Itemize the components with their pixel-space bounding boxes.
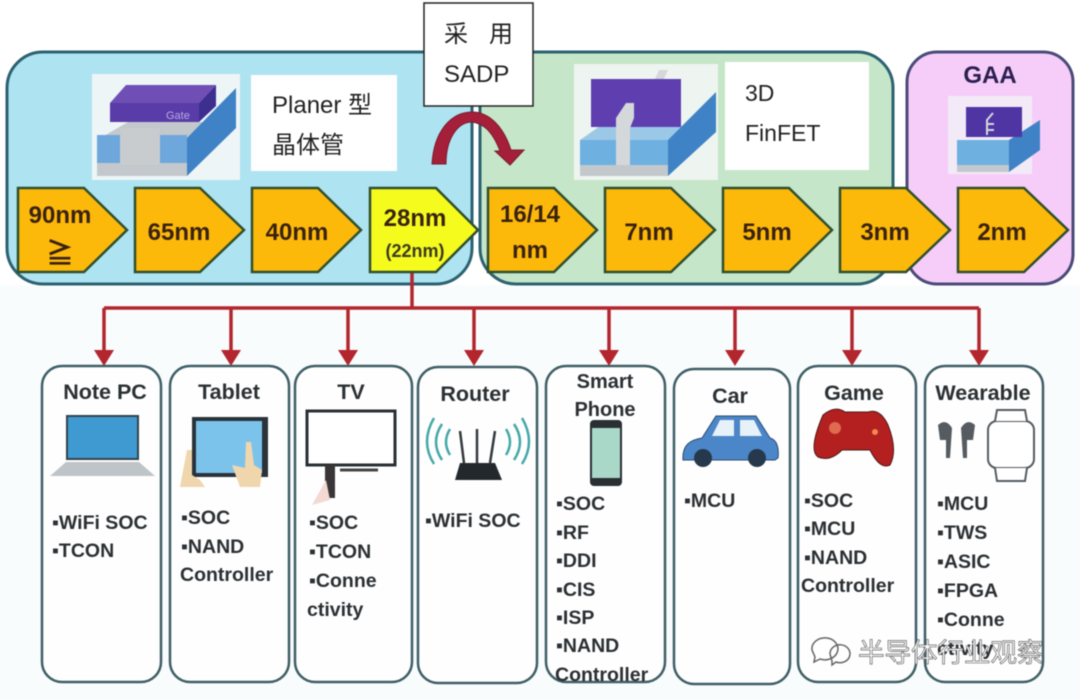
label: planar xyxy=(251,75,397,171)
icon: GAA transistor xyxy=(948,96,1040,174)
card: Smart Phone: ▪SOC xyxy=(556,493,605,515)
label: planar: Planer 型 xyxy=(272,92,372,119)
node: 28nm: (22nm) xyxy=(385,241,445,261)
card: Wearable: ▪ASIC xyxy=(937,551,991,573)
card: Smart Phone: ▪NAND xyxy=(556,635,619,657)
icon: planar transistor: Gate xyxy=(166,110,190,122)
card: Wearable: ▪TWS xyxy=(937,522,987,544)
card: Tablet: Controller xyxy=(180,564,274,586)
card: Tablet: ▪SOC xyxy=(181,507,230,529)
card: Wearable: ▪MCU xyxy=(937,493,988,515)
icon: laptop xyxy=(50,415,155,476)
node: 28nm xyxy=(370,188,478,272)
card: Smart Phone xyxy=(546,366,665,686)
icon: FinFET transistor xyxy=(574,64,718,180)
card: Wearable: ▪Conne xyxy=(937,609,1005,631)
card: Smart Phone: ▪ISP xyxy=(556,607,594,629)
node: 28nm: 28nm xyxy=(384,205,446,232)
card: TV xyxy=(295,366,412,682)
card: Car xyxy=(674,369,790,684)
card: Wearable: ▪FPGA xyxy=(937,580,998,602)
panel: FinFET xyxy=(480,52,893,284)
card: Smart Phone: Controller xyxy=(555,664,649,686)
card: Router: Router xyxy=(440,382,510,406)
node: 2nm xyxy=(958,188,1068,272)
card: TV: ▪SOC xyxy=(309,512,358,534)
icon: TV with hand xyxy=(307,411,395,505)
node: 5nm: 5nm xyxy=(742,219,792,246)
arrow: curved transition to FinFET xyxy=(432,112,524,165)
callout: SADP: SADP xyxy=(444,61,509,88)
card: TV: ▪TCON xyxy=(309,541,371,563)
label: FinFET: FinFET xyxy=(745,120,820,146)
callout: SADP: 用 xyxy=(489,21,513,48)
card: Car: ▪MCU xyxy=(684,490,735,512)
icon: tablet xyxy=(180,417,268,487)
node: 16/14nm xyxy=(488,188,597,272)
card: Note PC: ▪TCON xyxy=(52,540,114,562)
card: Smart Phone: Smart xyxy=(577,371,634,393)
card: Smart Phone: ▪RF xyxy=(556,522,589,544)
icon: planar transistor xyxy=(92,74,240,180)
card: Game: Controller xyxy=(801,575,895,597)
card: Game: ▪MCU xyxy=(804,518,855,540)
card: Tablet: Tablet xyxy=(198,380,260,404)
node: 3nm xyxy=(840,188,950,272)
card: Game xyxy=(798,366,916,682)
node: 90nm: 90nm xyxy=(29,202,91,229)
card: Smart Phone: ▪CIS xyxy=(556,579,595,601)
heading: GAA: GAA xyxy=(963,62,1017,89)
card: Router: ▪WiFi SOC xyxy=(425,510,521,532)
card: Wearable: Wearable xyxy=(935,381,1031,405)
card: Wearable xyxy=(925,366,1043,682)
card: TV: ctivity xyxy=(307,599,364,621)
node: 90nm xyxy=(18,188,127,272)
card: Note PC: Note PC xyxy=(63,380,147,404)
card: Router xyxy=(418,367,537,683)
card: TV: ▪Conne xyxy=(309,570,377,592)
node: 3nm: 3nm xyxy=(860,219,910,246)
node: 65nm xyxy=(135,188,244,272)
callout: SADP xyxy=(424,3,533,106)
icon: router with signal xyxy=(427,418,529,480)
label: FinFET xyxy=(725,62,869,170)
card: Smart Phone: Phone xyxy=(574,399,636,421)
icon: game controller xyxy=(814,409,894,466)
node: 90nm: ≧ xyxy=(46,238,74,269)
icon: smartphone xyxy=(590,420,622,486)
card: Game: ▪NAND xyxy=(804,547,867,569)
card: Tablet xyxy=(170,366,289,682)
card: Smart Phone: ▪DDI xyxy=(556,550,596,572)
panel: planar transistor xyxy=(7,52,472,284)
node: 7nm xyxy=(605,188,715,272)
card: Note PC: ▪WiFi SOC xyxy=(52,512,148,534)
card: Wearable: ctivity xyxy=(937,638,994,660)
card: Car: Car xyxy=(712,384,749,408)
node: 2nm: 2nm xyxy=(977,219,1027,246)
icon: car xyxy=(683,416,778,467)
panel: GAA xyxy=(907,52,1073,284)
label: FinFET: 3D xyxy=(745,80,774,106)
callout: SADP: 采 xyxy=(444,21,468,48)
card: Note PC xyxy=(42,366,161,682)
watermark: 半导体行业观察 xyxy=(858,638,1044,668)
card: Tablet: ▪NAND xyxy=(181,536,244,558)
label: planar: 晶体管 xyxy=(272,132,344,159)
card: Game: Game xyxy=(824,381,884,405)
icon: earbuds and watch xyxy=(938,410,1034,481)
node: 5nm xyxy=(723,188,832,272)
card: Game: ▪SOC xyxy=(804,490,853,512)
connector tree xyxy=(94,272,989,366)
node: 16/14nm: nm xyxy=(512,237,548,264)
node: 65nm: 65nm xyxy=(148,219,210,246)
node: 40nm: 40nm xyxy=(266,219,328,246)
node: 16/14nm: 16/14 xyxy=(500,201,561,228)
node: 40nm xyxy=(252,188,361,272)
node: 7nm: 7nm xyxy=(624,219,674,246)
card: TV: TV xyxy=(337,380,365,404)
